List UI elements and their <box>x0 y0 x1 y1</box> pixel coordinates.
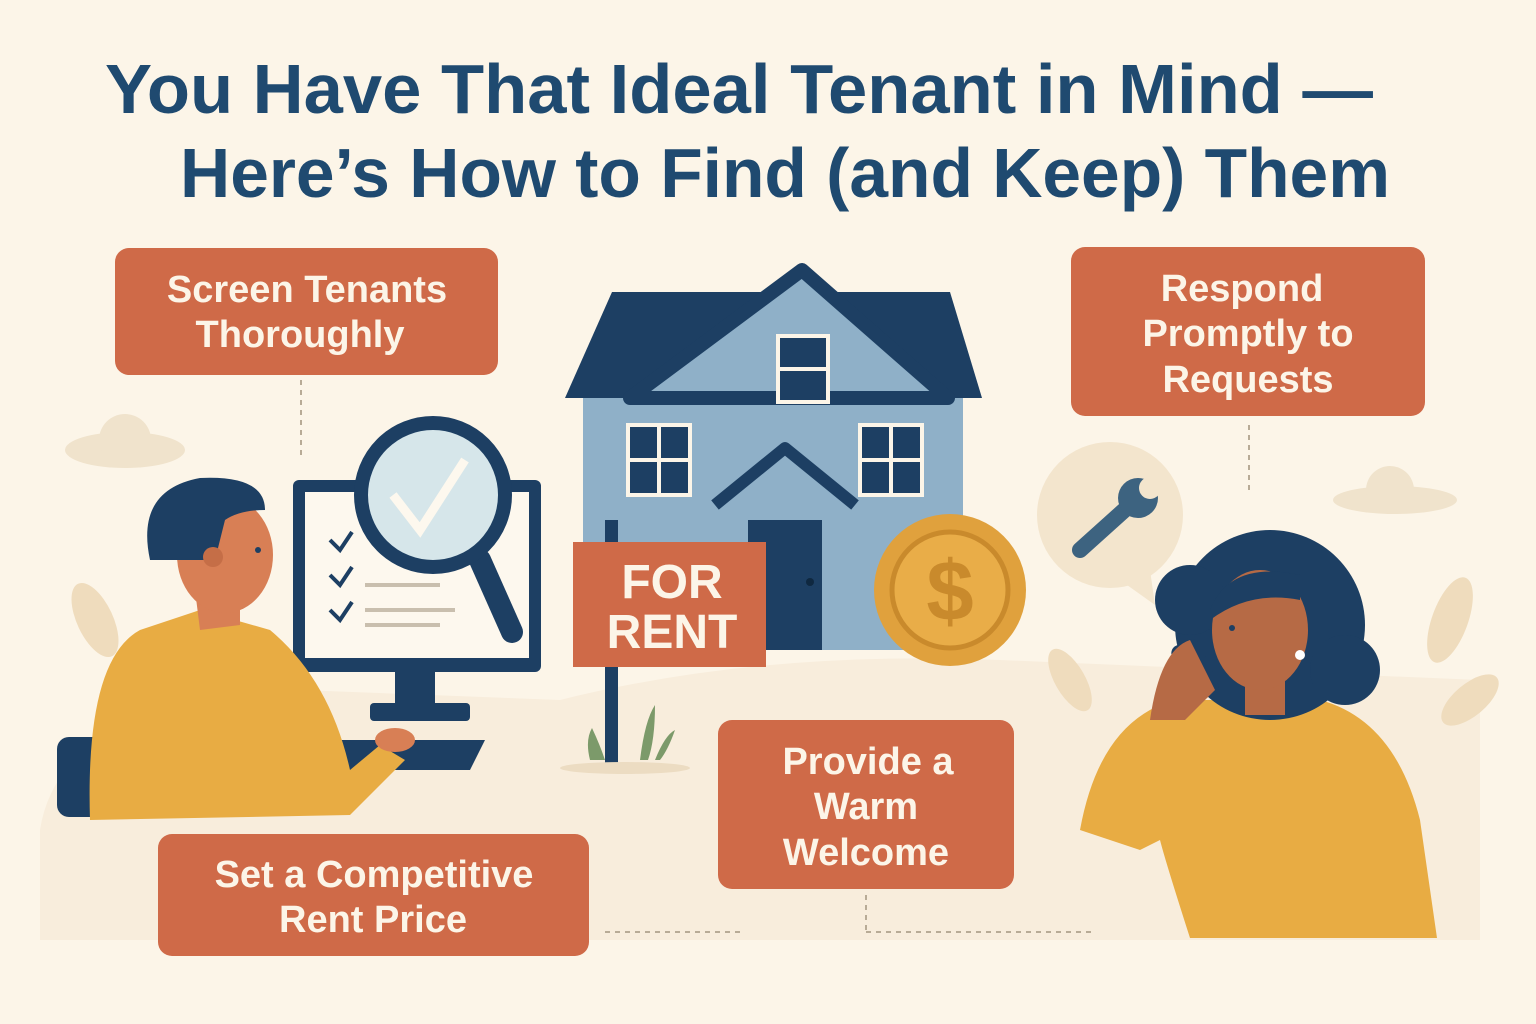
box: competitive rent: Rent Price <box>279 899 467 941</box>
box: respond promptly <box>1071 247 1425 416</box>
box: screen tenants: Screen Tenants <box>167 269 447 311</box>
box: respond promptly: Requests <box>1162 359 1334 401</box>
for rent sign: FOR <box>621 556 723 609</box>
computer <box>290 423 541 770</box>
box: warm welcome: Provide a <box>782 741 954 783</box>
title: You Have That Ideal Tenant in Mind — <box>105 50 1373 128</box>
box: respond promptly: Promptly to <box>1142 313 1354 355</box>
for rent sign <box>560 520 766 774</box>
clouds <box>65 414 1457 514</box>
icon: magnifier <box>361 423 512 632</box>
speech bubble with wrench <box>1037 442 1183 605</box>
title <box>105 50 1390 212</box>
man <box>57 478 415 820</box>
box: screen tenants <box>115 248 498 375</box>
woman <box>1080 530 1437 938</box>
coin <box>874 514 1026 666</box>
box: warm welcome: Warm <box>814 786 918 828</box>
ground <box>40 658 1480 940</box>
for rent sign: RENT <box>607 606 737 659</box>
box: respond promptly: Respond <box>1161 268 1323 310</box>
house <box>565 270 982 650</box>
title: Here’s How to Find (and Keep) Them <box>180 134 1390 212</box>
plants <box>62 572 1507 735</box>
dashed connectors <box>301 380 1249 932</box>
box: competitive rent <box>158 834 589 956</box>
box: screen tenants: Thoroughly <box>196 314 404 356</box>
box: warm welcome <box>718 720 1014 889</box>
box: competitive rent: Set a Competitive <box>215 854 533 896</box>
box: warm welcome: Welcome <box>783 832 949 874</box>
coin: $ <box>926 544 974 639</box>
